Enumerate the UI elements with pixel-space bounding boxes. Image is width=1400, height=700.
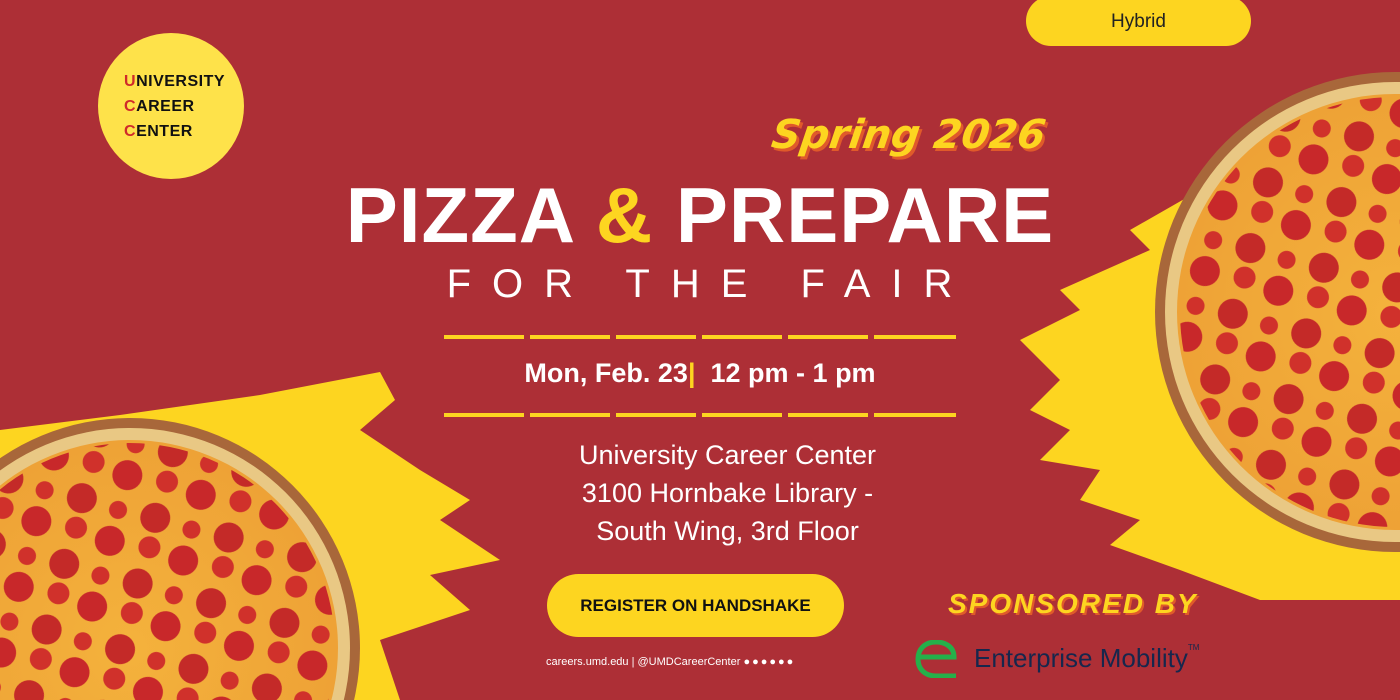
brush: left [0, 372, 500, 700]
hybrid tag: Hybrid [1111, 11, 1166, 32]
logo circle: CENTER [124, 123, 193, 140]
hybrid tag [1026, 0, 1251, 46]
date/time: Mon, Feb. 23| 12 pm - 1 pm [524, 358, 876, 388]
register button: REGISTER ON HANDSHAKE [580, 596, 811, 615]
logo circle [98, 33, 244, 179]
sponsored by: SPONSORED BY [948, 588, 1198, 619]
pizza: left [0, 418, 360, 700]
dashed lines [444, 335, 956, 417]
spring 2026: Spring 2026 [769, 112, 1048, 158]
location: 3100 Hornbake Library - [582, 478, 873, 508]
register button [547, 574, 844, 637]
sponsor logo: Enterprise MobilityTM [974, 643, 1199, 673]
logo circle: UNIVERSITY [124, 73, 225, 90]
sponsor logo [916, 640, 1199, 678]
location: South Wing, 3rd Floor [596, 516, 859, 546]
footer contact: careers.umd.edu | @UMDCareerCenter ●●●●●● [546, 656, 795, 668]
logo circle: CAREER [124, 98, 195, 115]
subtitle: FOR THE FAIR [447, 262, 973, 306]
pizza: right [1155, 72, 1400, 552]
title: PIZZA & PREPARE [346, 171, 1054, 259]
location: University Career Center [579, 440, 876, 470]
brush: right [1020, 100, 1400, 600]
icon: enterprise e [916, 640, 956, 678]
location [579, 440, 876, 546]
